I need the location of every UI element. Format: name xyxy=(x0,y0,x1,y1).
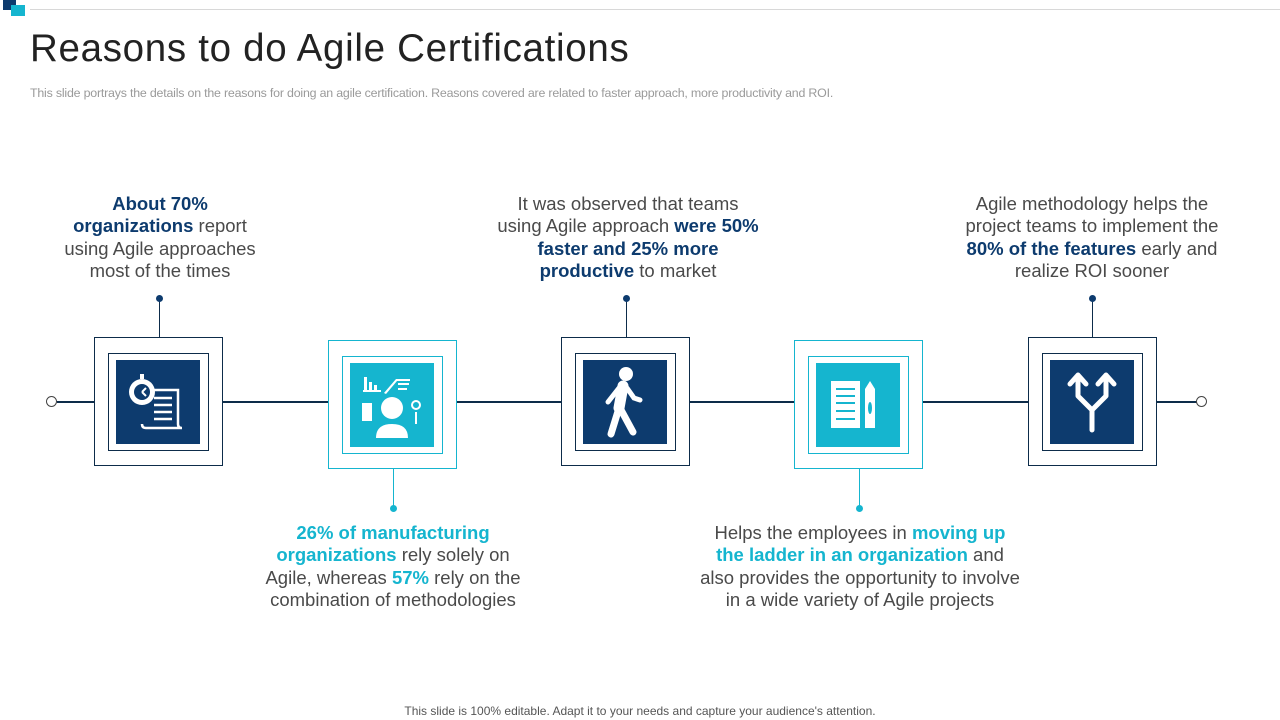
text 3: productive to market xyxy=(540,260,716,281)
icon box 5: split arrows xyxy=(1028,337,1157,466)
text 5 xyxy=(966,193,1218,281)
text 4 xyxy=(700,522,1020,610)
text 3: using Agile approach were 50% xyxy=(497,215,759,236)
text 1: About 70% xyxy=(112,193,208,214)
text 5: 80% of the features early and xyxy=(967,238,1217,259)
text 5: Agile methodology helps the xyxy=(976,193,1208,214)
icon box 1: stopwatch and scroll xyxy=(94,337,223,466)
text 1: most of the times xyxy=(90,260,230,281)
text 2: combination of methodologies xyxy=(270,589,516,610)
text 3 xyxy=(497,193,759,281)
text 4: Helps the employees in moving up xyxy=(714,522,1005,543)
text 4: also provides the opportunity to involve xyxy=(700,567,1020,588)
timeline line xyxy=(57,401,1197,402)
text 1: using Agile approaches xyxy=(64,238,256,259)
text 3: faster and 25% more xyxy=(538,238,718,259)
text 4: the ladder in an organization and xyxy=(716,544,1004,565)
text 4: in a wide variety of Agile projects xyxy=(726,589,994,610)
text 1: organizations report xyxy=(73,215,247,236)
icon box 3: walking person xyxy=(561,337,690,466)
text 2: 26% of manufacturing xyxy=(296,522,490,543)
text 2 xyxy=(265,522,521,610)
text 1 xyxy=(64,193,256,281)
footer: This slide is 100% editable. Adapt it to your needs and capture your audience's attention. xyxy=(404,704,876,718)
connectors xyxy=(159,298,160,337)
logo mark xyxy=(3,0,25,16)
icon box 2: analyst xyxy=(328,340,457,469)
title: Reasons to do Agile Certifications xyxy=(30,27,629,70)
text 5: realize ROI sooner xyxy=(1015,260,1169,281)
text 5: project teams to implement the xyxy=(966,215,1218,236)
text 2: Agile, whereas 57% rely on the xyxy=(265,567,521,588)
subtitle: This slide portrays the details on the reasons for doing an agile certification. Reasons covered are related to faster approach, more productivity and ROI. xyxy=(30,86,833,100)
icon box 4: notes and crayon xyxy=(794,340,923,469)
text 2: organizations rely solely on xyxy=(276,544,510,565)
text 3: It was observed that teams xyxy=(517,193,739,214)
